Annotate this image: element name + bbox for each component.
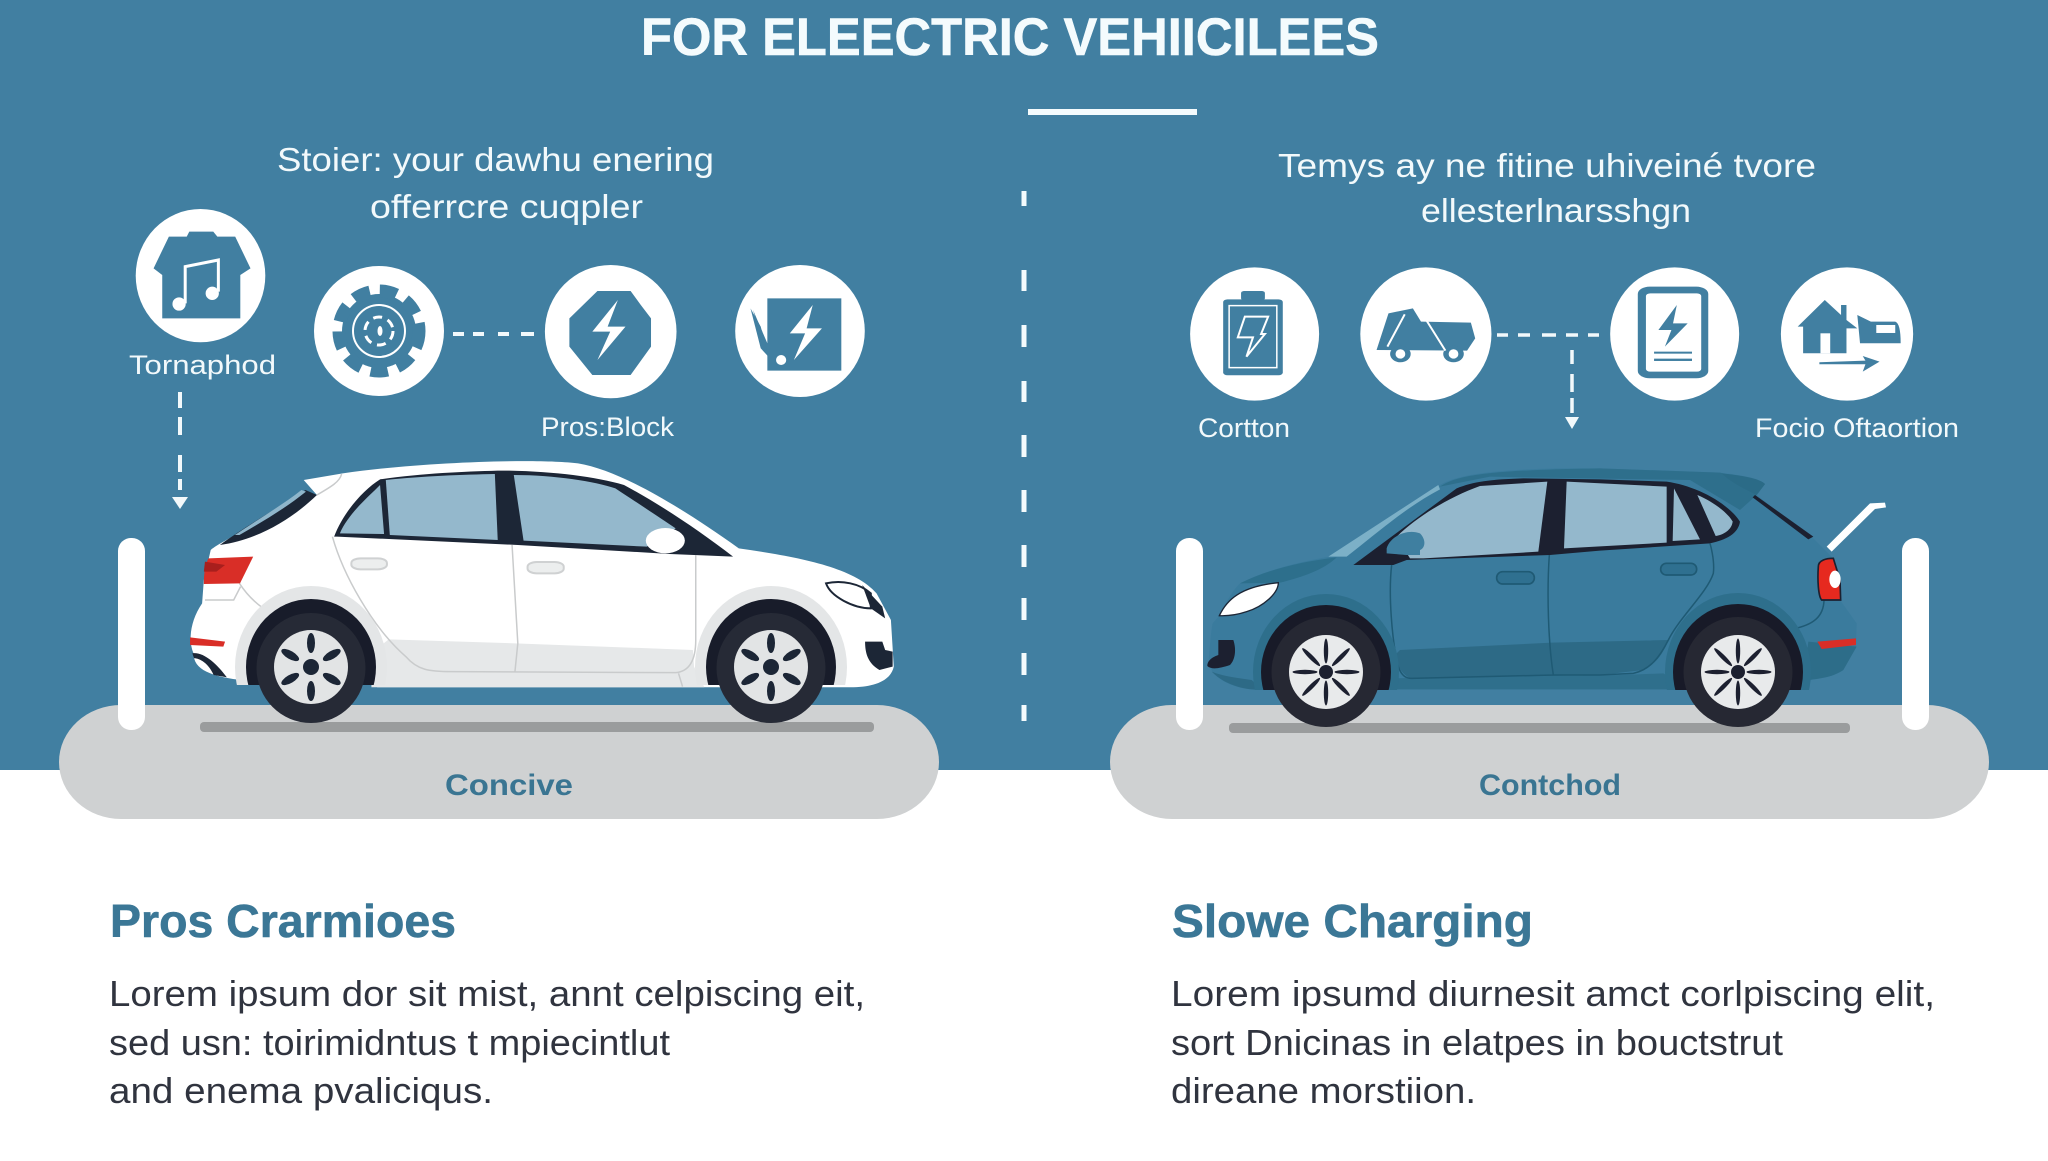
right body text: direane morstiion. — [1171, 1070, 1476, 1111]
dashed connector right row with arrow — [1497, 335, 1599, 429]
white car — [190, 461, 894, 748]
title underline — [1028, 109, 1197, 115]
icon label: Pros:Block: Pros:Block — [541, 412, 675, 442]
left subtitle: offerrcre cuqpler — [370, 188, 643, 225]
icon: house, car and arrow — [1781, 267, 1913, 401]
left subtitle: Stoier: your dawhu enering — [277, 141, 714, 178]
icon: battery — [1190, 267, 1319, 401]
right body text: Lorem ipsumd diurnesit amct corlpiscing elit, — [1171, 973, 1935, 1014]
icon: bolt panel — [735, 265, 865, 397]
right subtitle: ellesterlnarsshgn — [1421, 192, 1691, 229]
icon: house with music note — [136, 209, 265, 342]
right body text — [1171, 973, 1935, 1111]
left body text — [109, 973, 865, 1111]
platform label left: Concive — [445, 769, 573, 802]
platform label right: Contchod — [1479, 769, 1621, 802]
icon label: Tornaphod: Tornaphod — [129, 350, 276, 380]
right heading: Slowe Charging — [1172, 895, 1533, 947]
platform right — [1110, 538, 1989, 819]
dashed connector left row — [453, 332, 534, 336]
icon: bolt in octagon — [545, 265, 677, 398]
icon label: Cortton: Cortton — [1198, 413, 1290, 443]
icon: gear — [314, 266, 444, 396]
left heading: Pros Crarmioes — [110, 895, 456, 947]
left body text: Lorem ipsum dor sit mist, annt celpiscing eit, — [109, 973, 865, 1014]
left subtitle — [277, 141, 714, 225]
dashed arrow to white car — [172, 392, 188, 509]
icon label: Focio Oftaortion: Focio Oftaortion — [1755, 413, 1959, 443]
right subtitle — [1278, 147, 1816, 229]
icon: tablet with bolt — [1610, 267, 1739, 401]
icon: truck — [1360, 267, 1491, 401]
title: FOR ELEECTRIC VEHIICILEES — [641, 8, 1379, 67]
platform left — [59, 538, 939, 819]
blue background — [0, 0, 2048, 770]
right subtitle: Temys ay ne fitine uhiveiné tvore — [1278, 147, 1816, 184]
right body text: sort Dnicinas in elatpes in bouctstrut — [1171, 1022, 1783, 1063]
left body text: and enema pvaliciqus. — [109, 1070, 493, 1111]
left body text: sed usn: toirimidntus t mpiecintlut — [109, 1022, 670, 1063]
blue car — [1207, 468, 1886, 751]
centre dashed divider — [1022, 191, 1026, 721]
